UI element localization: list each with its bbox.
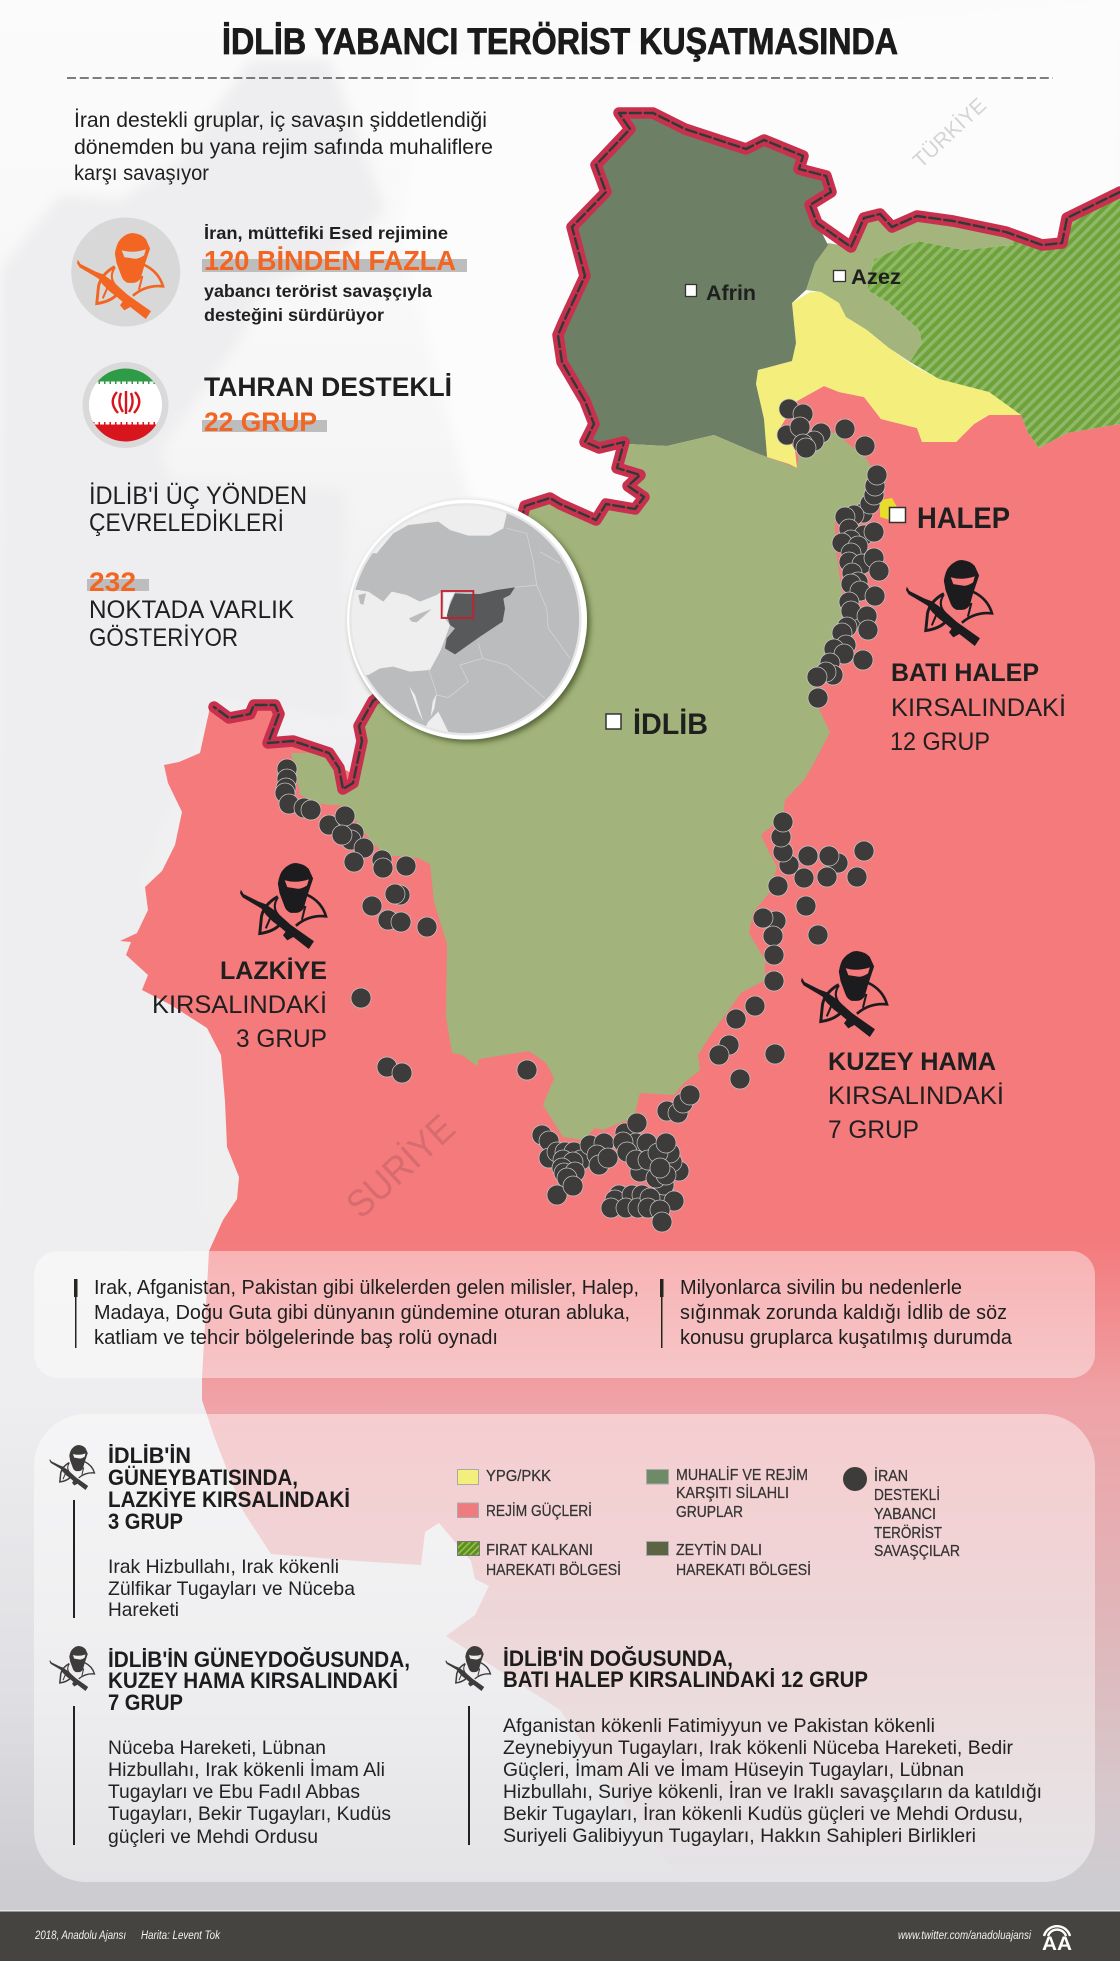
callout: Latakia: 3 GRUP: [236, 1025, 327, 1053]
legend: [458, 1465, 960, 1579]
group block: Latakia 3 groups: Zülfikar Tugayları ve Nüceba: [108, 1578, 355, 1600]
legend: İRAN: [874, 1466, 908, 1485]
credit: map: Harita: Levent Tok: [141, 1930, 221, 1942]
intro text: karşı savaşıyor: [74, 162, 209, 185]
title: İDLİB YABANCI TERÖRİST KUŞATMASINDA: [222, 21, 898, 62]
region: regime forces: [120, 386, 1120, 1911]
group block: Latakia 3 groups: 3 GRUP: [108, 1509, 183, 1534]
stat: 232 points: GÖSTERİYOR: [89, 623, 238, 652]
credit: agency: 2018, Anadolu Ajansı: [34, 1930, 126, 1942]
intro text: dönemden bu yana rejim safında muhaliflere: [74, 136, 493, 159]
callout: Latakia: KIRSALINDAKİ: [152, 990, 327, 1019]
text: surrounding Idlib from three sides: İDLİB'İ ÜÇ YÖNDEN: [89, 481, 307, 510]
legend: KARŞITI SİLAHLI: [676, 1483, 789, 1502]
callout: north Hama: KIRSALINDAKİ: [828, 1081, 1004, 1110]
group block: west Aleppo 12 groups: Afganistan kökenli Fatimiyyun ve Pakistan kökenli: [503, 1715, 935, 1737]
group block: west Aleppo 12 groups: Zeynebiyyun Tugayları, Irak kökenli Nüceba Hareketi, Bedir: [503, 1737, 1013, 1759]
map label: TÜRKİYE: TÜRKİYE: [909, 94, 991, 173]
callout: north Hama: [828, 1048, 1004, 1144]
region: YPG/PKK: [756, 292, 1021, 468]
callout: north Hama: 7 GRUP: [828, 1116, 919, 1144]
text: militias: [94, 1277, 639, 1349]
legend: FIRAT KALKANI: [486, 1542, 593, 1559]
stat: Tehran-backed 22 groups: TAHRAN DESTEKLİ: [204, 372, 452, 402]
region: Euphrates Shield hatched area: [867, 192, 1120, 448]
intro text: [74, 109, 493, 185]
text: civilians: sığınmak zorunda kaldığı İdlib de söz: [680, 1301, 1007, 1324]
text: militias: katliam ve tehcir bölgelerinde baş rolü oynadı: [94, 1327, 498, 1349]
city label: Afrin: Afrin: [706, 282, 756, 305]
Iran-backed fighter dots: Aleppo front: [777, 399, 889, 708]
group block: Latakia 3 groups: LAZKİYE KIRSALINDAKİ: [108, 1487, 350, 1512]
text: surrounding Idlib from three sides: [89, 481, 307, 537]
stat: 120 thousand fighters: İran, müttefiki Esed rejimine: [204, 223, 448, 243]
legend: HAREKATI BÖLGESİ: [676, 1560, 811, 1579]
Iran-backed fighter dots: southern Idlib cluster: [532, 1113, 689, 1232]
icon: fighter, west Aleppo: [906, 560, 992, 646]
icon: Iran flag: [82, 362, 168, 448]
group block: Latakia 3 groups: Irak Hizbullahı, Irak kökenli: [108, 1556, 339, 1578]
Iran-backed fighter dots: Hama front: [657, 812, 874, 1123]
icon: orange fighter badge: [71, 218, 180, 326]
legend: YPG/PKK: [486, 1468, 551, 1485]
group block: west Aleppo 12 groups: Güçleri, İmam Ali ve İmam Hüseyin Tugayları, Lübnan: [503, 1758, 964, 1781]
city label: Afrin: [686, 282, 756, 305]
panel: context text: [34, 1251, 1095, 1378]
group block: west Aleppo 12 groups: İDLİB'İN DOĞUSUNDA,: [503, 1646, 733, 1671]
locator globe: [340, 495, 587, 740]
legend: DESTEKLİ: [874, 1485, 940, 1504]
callout: west Aleppo: KIRSALINDAKİ: [891, 693, 1066, 722]
group block: Latakia 3 groups: [50, 1443, 355, 1621]
stat: 232 points: [87, 567, 294, 652]
group block: north Hama 7 groups: güçleri ve Mehdi Ordusu: [108, 1826, 318, 1848]
group block: west Aleppo 12 groups: Bekir Tugayları, İran kökenli Kudüs güçleri ve Mehdi Ordusu,: [503, 1802, 1023, 1825]
group block: north Hama 7 groups: Tugayları, Bekir Tugayları, Kudüs: [108, 1803, 391, 1825]
footer: [0, 1910, 1120, 1961]
group block: west Aleppo 12 groups: Suriyeli Galibiyyun Tugayları, Hakkın Sahipleri Birlikleri: [503, 1825, 976, 1847]
map label: SURİYE: SURİYE: [338, 1106, 464, 1227]
panel: groups and legend: [34, 1414, 1095, 1882]
land haze: Turkey: [400, 0, 1120, 540]
group block: north Hama 7 groups: KUZEY HAMA KIRSALINDAKİ: [108, 1668, 398, 1693]
stat: 232 points: NOKTADA VARLIK: [89, 596, 294, 624]
icon: AA logo: AA: [1042, 1934, 1072, 1955]
group block: north Hama 7 groups: 7 GRUP: [108, 1690, 183, 1715]
legend: HAREKATI BÖLGESİ: [486, 1560, 621, 1579]
text: civilians: Milyonlarca sivilin bu nedenlerle: [680, 1277, 962, 1299]
stat: 120 thousand fighters: desteğini sürdürüyor: [204, 305, 384, 325]
sea haze: [0, 60, 385, 1250]
callout: west Aleppo: [890, 659, 1066, 756]
group block: north Hama 7 groups: Tugayları ve Ebu Fadıl Abbas: [108, 1781, 360, 1803]
callout: Latakia: [152, 957, 327, 1053]
group block: north Hama 7 groups: İDLİB'İN GÜNEYDOĞUSUNDA,: [108, 1647, 410, 1672]
callout: west Aleppo: 12 GRUP: [890, 728, 990, 756]
region: opposition-held Idlib: [291, 432, 878, 1140]
credit: social: www.twitter.com/anadoluajansi: [898, 1930, 1031, 1942]
Iran-backed fighter dots: Latakia front: [275, 759, 537, 1083]
highlighted number: 120 BİNDEN FAZLA: [204, 245, 456, 276]
text: militias: Madaya, Doğu Guta gibi dünyanın gündemine oturan abluka,: [94, 1302, 630, 1324]
legend: SAVAŞÇILAR: [874, 1543, 960, 1560]
icon: fighter, Latakia: [240, 863, 326, 949]
legend: YABANCI: [874, 1506, 936, 1523]
region: Aleppo yellow spot: [880, 498, 897, 520]
region: opposition-held Azez area: [806, 214, 1014, 362]
city label: Idlib: İDLİB: [633, 708, 708, 741]
group block: north Hama 7 groups: Nüceba Hareketi, Lübnan: [108, 1737, 326, 1759]
callout: Latakia: LAZKİYE: [220, 957, 327, 985]
callout: north Hama: KUZEY HAMA: [828, 1048, 996, 1076]
text: civilians: konusu gruplarca kuşatılmış durumda: [680, 1327, 1013, 1349]
text: surrounding Idlib from three sides: ÇEVRELEDİKLERİ: [89, 508, 284, 537]
group block: north Hama 7 groups: Hizbullahı, Irak kökenli İmam Ali: [108, 1758, 385, 1781]
stat: 120 thousand fighters: yabancı terörist savaşçıyla: [204, 281, 432, 301]
legend: ZEYTİN DALI: [676, 1540, 762, 1559]
group block: Latakia 3 groups: İDLİB'İN: [108, 1443, 191, 1468]
group block: west Aleppo 12 groups: Hizbullahı, Suriye kökenli, İran ve Iraklı savaşçıların da katıldığı: [503, 1780, 1042, 1803]
border: Turkey-Syria: [214, 113, 1120, 789]
group block: north Hama 7 groups: [50, 1646, 410, 1848]
city label: Halep: HALEP: [917, 502, 1010, 535]
text: civilians: [680, 1277, 1013, 1349]
intro text: İran destekli gruplar, iç savaşın şiddetlendiği: [74, 109, 487, 132]
highlighted number: 232: [89, 567, 136, 597]
legend: MUHALİF VE REJİM: [676, 1465, 808, 1484]
group block: west Aleppo 12 groups: [446, 1646, 1042, 1847]
icon: AA logo: [1042, 1926, 1072, 1955]
group block: Latakia 3 groups: Hareketi: [108, 1599, 179, 1621]
legend: GRUPLAR: [676, 1504, 743, 1521]
text: militias: Irak, Afganistan, Pakistan gibi ülkelerden gelen milisler, Halep,: [94, 1277, 639, 1299]
group block: west Aleppo 12 groups: BATI HALEP KIRSALINDAKİ 12 GRUP: [503, 1667, 868, 1692]
highlighted number: 22 GRUP: [204, 407, 317, 437]
legend: TERÖRİST: [874, 1523, 942, 1542]
stat: Tehran-backed 22 groups: [202, 372, 452, 437]
group block: Latakia 3 groups: GÜNEYBATISINDA,: [108, 1465, 298, 1490]
region: Olive Branch area Afrin: [558, 113, 831, 457]
stat: 120 thousand fighters: [202, 223, 467, 325]
callout: west Aleppo: BATI HALEP: [891, 659, 1039, 687]
legend: REJİM GÜÇLERİ: [486, 1501, 592, 1520]
city label: Azez: Azez: [851, 266, 901, 289]
icon: fighter, north Hama: [801, 951, 887, 1037]
